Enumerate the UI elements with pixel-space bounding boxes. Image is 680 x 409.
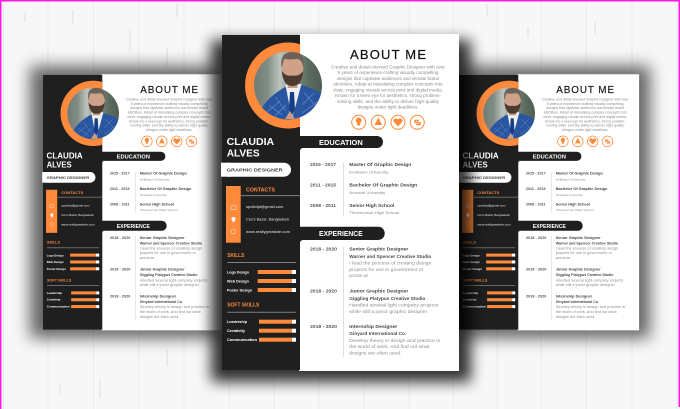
about text: identities. Adept at translating complex concepts into <box>544 111 627 115</box>
education timeline: Anrowal University <box>140 193 168 197</box>
white page <box>102 74 223 330</box>
about text: designs that captivate audiences and elevate brand <box>337 76 440 81</box>
skills <box>227 253 296 292</box>
skills: Poster Design <box>47 267 66 271</box>
about text: solving skills, and the ability to deliver high-quality <box>546 124 624 128</box>
skills: SKILLS <box>47 240 60 245</box>
education timeline: Master Of Graphic Design <box>556 172 603 176</box>
heading: education: EDUCATION <box>319 138 363 147</box>
contacts panel: Cox's Bazar, Bangladesh <box>246 218 289 222</box>
experience timeline: Internship Designer <box>140 295 177 299</box>
job title pill <box>42 172 95 183</box>
soft skills: Leadership <box>463 291 478 295</box>
experience timeline: Internship Designer <box>349 324 398 329</box>
about text: Known for a keen eye for aesthetics, strong problem- <box>545 119 625 123</box>
portrait photo <box>67 87 120 143</box>
trait icons <box>352 115 424 129</box>
about text: designs that captivate audiences and elevate brand <box>130 106 208 110</box>
heading: education: EDUCATION <box>533 155 566 161</box>
about text: designs that captivate audiences and elevate brand <box>546 106 624 110</box>
education timeline: Bachelor Of Graphic Design <box>140 187 191 191</box>
education timeline: Bachelor Of Graphic Design <box>349 182 418 188</box>
experience timeline: Junior Graphic Designer <box>140 268 185 272</box>
skills: Web Design <box>227 280 249 284</box>
skills: Logo Design <box>47 253 64 257</box>
heading: education: EDUCATION <box>117 155 150 161</box>
experience timeline: Handled several light company projects <box>349 302 439 308</box>
name <box>47 152 83 169</box>
about text: clear, engaging visuals across print and digital media. <box>127 115 211 119</box>
orange ring <box>245 42 300 128</box>
education timeline <box>110 172 191 213</box>
experience timeline: 2018 - 2020 <box>310 288 338 294</box>
name: CLAUDIA <box>47 152 83 161</box>
education timeline: 2011 - 2015 <box>110 187 130 191</box>
skills <box>47 240 99 271</box>
job title pill <box>221 163 291 177</box>
education timeline: 2011 - 2015 <box>310 182 337 188</box>
trait icons <box>558 136 613 147</box>
experience timeline: designs are often used. <box>349 350 401 356</box>
job title pill: GRAPHIC DESIGNER <box>47 176 90 180</box>
education timeline: Master Of Graphic Design <box>140 172 187 176</box>
soft skills: Creativity <box>463 298 477 302</box>
education timeline: 2011 - 2015 <box>526 187 546 191</box>
skills: Logo Design <box>227 270 249 274</box>
experience timeline: personal use <box>556 256 570 260</box>
experience timeline: while still a junior graphic designer <box>556 283 616 287</box>
education timeline <box>310 162 418 217</box>
education timeline <box>526 172 607 213</box>
contacts panel: Cox's Bazar, Bangladesh <box>61 213 94 217</box>
orange ring <box>61 81 102 146</box>
white page <box>299 34 459 371</box>
contacts panel <box>462 190 518 233</box>
heading: about me: ABOUT ME <box>140 85 198 96</box>
contacts panel: Cox's Bazar, Bangladesh <box>477 213 510 217</box>
education timeline: Kellhaton University <box>140 177 170 181</box>
resume: right copy <box>458 74 639 330</box>
experience timeline: the world of work. And find out what <box>140 310 201 314</box>
experience timeline: I lead the process of creating design <box>349 260 432 266</box>
education timeline: Master Of Graphic Design <box>349 162 412 167</box>
experience timeline <box>310 246 441 357</box>
about text: solving skills, and the ability to deliver high-quality <box>130 124 208 128</box>
soft skills <box>227 303 296 342</box>
experience timeline: Junior Graphic Designer <box>556 268 601 272</box>
about text: identities. Adept at translating complex concepts into <box>334 82 443 87</box>
education timeline: Anrowal University <box>349 190 385 195</box>
experience timeline: Handled several light company projects <box>556 278 624 282</box>
experience timeline: Warner and Spencer Creative Studio <box>556 241 618 245</box>
experience timeline: Warner and Spencer Creative Studio <box>349 254 432 259</box>
education timeline: Anrowal University <box>556 193 584 197</box>
experience timeline: Warner and Spencer Creative Studio <box>140 241 202 245</box>
job title pill: GRAPHIC DESIGNER <box>463 176 506 180</box>
about text: Creative and detail-oriented Graphic Designer with over <box>331 64 446 69</box>
contacts panel: www.reallygreatsite.com <box>477 222 512 226</box>
experience timeline: Internship Designer <box>556 295 593 299</box>
education timeline: Bachelor Of Graphic Design <box>556 187 607 191</box>
experience timeline: projects for use in government or <box>140 251 197 255</box>
resume: left copy <box>42 74 223 330</box>
education timeline: Kellhaton University <box>349 170 388 174</box>
about text: Known for a keen eye for aesthetics, strong problem- <box>129 119 209 123</box>
experience timeline: I lead the process of creating design <box>140 246 202 250</box>
soft skills: Leadership <box>227 320 248 324</box>
name: CLAUDIA <box>227 136 275 148</box>
contacts panel: www.reallygreatsite.com <box>61 222 96 226</box>
name <box>463 152 499 169</box>
education timeline: Senior High School <box>556 203 590 207</box>
education timeline: Timmerman High School <box>349 210 399 215</box>
heading: about me: ABOUT ME <box>556 85 614 96</box>
experience timeline: the world of work. And find out what <box>556 310 617 314</box>
about text: designs under tight deadlines. <box>358 105 418 110</box>
experience timeline: Giggling Platypus Creative Studio <box>556 273 614 277</box>
about text: designs under tight deadlines. <box>562 128 608 132</box>
soft skills: Communication <box>227 338 257 342</box>
portrait photo <box>483 87 536 143</box>
skills: SKILLS <box>227 253 245 259</box>
name: ALVES <box>463 160 488 169</box>
heading: experience: EXPERIENCE <box>117 224 150 230</box>
skills: Poster Design <box>463 267 482 271</box>
contacts panel: CONTACTS <box>477 190 500 195</box>
soft skills <box>463 277 515 309</box>
trait icons <box>142 136 197 147</box>
experience timeline: Ginyard International Co. <box>556 300 599 304</box>
experience timeline: designs are often used. <box>556 315 595 319</box>
heading: about me: ABOUT ME <box>350 47 426 62</box>
education timeline: 2015 - 2017 <box>310 162 337 167</box>
orange ring <box>477 81 518 146</box>
education timeline: Senior High School <box>140 203 174 207</box>
about text: clear, engaging visuals across print and digital media. <box>543 115 627 119</box>
education timeline: 2015 - 2017 <box>526 172 546 176</box>
experience timeline: Senior Graphic Designer <box>349 246 409 252</box>
experience timeline: 2018 - 2020 <box>310 246 338 252</box>
about text: identities. Adept at translating complex concepts into <box>128 111 211 115</box>
experience timeline: 2018 - 2020 <box>110 236 131 240</box>
experience timeline: Develop theory in design and practice in <box>349 338 441 343</box>
job title pill <box>458 172 511 183</box>
sidebar and section pills <box>43 75 167 330</box>
experience timeline: designs are often used. <box>140 315 179 319</box>
about text: 5 years of experience crafting visually compelling <box>338 70 439 75</box>
experience timeline: Giggling Platypus Creative Studio <box>349 296 426 301</box>
shadow: main resume <box>211 40 471 382</box>
name: ALVES <box>47 160 72 169</box>
experience timeline <box>110 236 209 320</box>
experience timeline: Junior Graphic Designer <box>349 288 409 294</box>
experience timeline: I lead the process of creating design <box>556 246 618 250</box>
experience timeline: 2018 - 2020 <box>310 324 338 329</box>
experience timeline: 2018 - 2020 <box>526 236 547 240</box>
about text: Known for a keen eye for aesthetics, strong problem- <box>335 93 442 98</box>
skills: Poster Design <box>227 288 252 292</box>
about text: Creative and detail-oriented Graphic Designer with over <box>542 97 629 101</box>
experience timeline: 2018 - 2020 <box>526 268 547 272</box>
contacts panel: spotlotjd@gmail.com <box>246 205 283 209</box>
contacts panel <box>226 186 300 243</box>
heading: experience: EXPERIENCE <box>319 229 363 238</box>
experience timeline: Ginyard International Co. <box>349 331 406 336</box>
about text: solving skills, and the ability to deliver high-quality <box>337 99 440 104</box>
education timeline: Senior High School <box>349 203 394 208</box>
soft skills: Leadership <box>47 291 62 295</box>
soft skills: SOFT SKILLS <box>463 277 488 282</box>
experience timeline: projects for use in government or <box>556 251 613 255</box>
name <box>227 136 275 160</box>
about text: 5 years of experience crafting visually compelling <box>131 102 208 106</box>
experience timeline: personal use <box>349 273 369 278</box>
education timeline: 2015 - 2017 <box>110 172 130 176</box>
experience timeline: Develop theory in design and practice in <box>556 305 625 309</box>
soft skills: SOFT SKILLS <box>227 303 260 309</box>
experience timeline: 2018 - 2020 <box>526 295 547 299</box>
shadow: left resume <box>30 66 220 338</box>
experience timeline: Senior Graphic Designer <box>556 236 601 240</box>
white page <box>518 74 639 330</box>
portrait photo <box>254 51 323 125</box>
education timeline: 2008 - 2011 <box>526 203 546 207</box>
name: CLAUDIA <box>463 152 499 161</box>
soft skills: Communication <box>47 305 70 309</box>
skills: Logo Design <box>463 253 480 257</box>
soft skills: Creativity <box>47 298 61 302</box>
skills: SKILLS <box>463 240 476 245</box>
name: ALVES <box>227 148 260 160</box>
contacts panel: spotlotjd@gmail.com <box>477 204 506 208</box>
shadow: right resume <box>462 66 650 338</box>
resume: main centre <box>221 34 459 371</box>
sidebar and section pills <box>222 35 385 370</box>
experience timeline: 2018 - 2020 <box>110 268 131 272</box>
about text: 5 years of experience crafting visually compelling <box>547 102 624 106</box>
soft skills: SOFT SKILLS <box>47 277 72 282</box>
education timeline: Timmerman High School <box>556 208 594 212</box>
about text <box>542 97 629 132</box>
experience timeline: Senior Graphic Designer <box>140 236 185 240</box>
about text: Creative and detail-oriented Graphic Designer with over <box>126 97 213 101</box>
soft skills: Communication <box>463 305 486 309</box>
experience timeline: the world of work. And find out what <box>349 344 430 349</box>
skills: Web Design <box>47 260 64 264</box>
about text <box>331 64 446 110</box>
education timeline: Kellhaton University <box>556 177 586 181</box>
experience timeline <box>526 236 625 320</box>
experience timeline: projects for use in government or <box>349 267 424 272</box>
contacts panel <box>46 190 102 233</box>
contacts panel: spotlotjd@gmail.com <box>61 204 90 208</box>
experience timeline: Ginyard International Co. <box>140 300 183 304</box>
experience timeline: personal use <box>140 256 154 260</box>
soft skills: Creativity <box>227 329 245 333</box>
education timeline: Timmerman High School <box>140 208 178 212</box>
soft skills <box>47 277 99 309</box>
contacts panel: CONTACTS <box>246 188 276 194</box>
experience timeline: while still a junior graphic designer <box>140 283 200 287</box>
experience timeline: Giggling Platypus Creative Studio <box>140 273 198 277</box>
experience timeline: while still a junior graphic designer <box>349 309 428 314</box>
heading: experience: EXPERIENCE <box>533 224 566 230</box>
experience timeline: Handled several light company projects <box>140 278 208 282</box>
sidebar and section pills <box>459 75 583 330</box>
contacts panel: CONTACTS <box>61 190 84 195</box>
education timeline: 2008 - 2011 <box>310 203 337 208</box>
about text: clear, engaging visuals across print and digital media. <box>333 87 443 92</box>
job title pill: GRAPHIC DESIGNER <box>227 168 284 173</box>
contacts panel: www.reallygreatsite.com <box>246 230 290 234</box>
about text <box>126 97 213 132</box>
experience timeline: 2018 - 2020 <box>110 295 131 299</box>
experience timeline: Develop theory in design and practice in <box>140 305 209 309</box>
skills: Web Design <box>463 260 480 264</box>
skills <box>463 240 515 271</box>
about text: designs under tight deadlines. <box>146 128 192 132</box>
education timeline: 2008 - 2011 <box>110 203 130 207</box>
